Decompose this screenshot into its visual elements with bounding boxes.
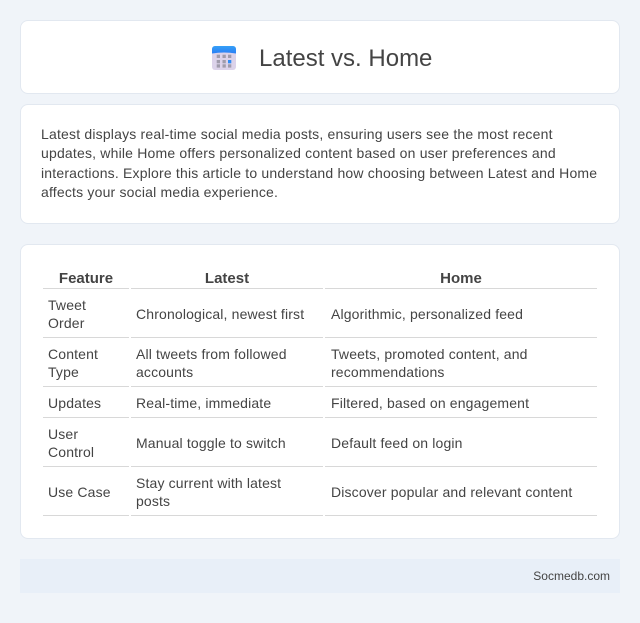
- row: Content Type: recommendations: [331, 364, 445, 380]
- row: Content Type: Content: [48, 346, 98, 362]
- row: Updates: Updates: [48, 395, 101, 411]
- icon: calendar: [212, 46, 236, 70]
- row: Tweet Order: Order: [48, 315, 85, 331]
- intro text: Latest displays real-time social media posts, ensuring users see the most recent: [41, 126, 553, 142]
- table header: Home: [440, 270, 482, 287]
- table header: Feature: [59, 270, 113, 287]
- row: Content Type: [48, 346, 528, 380]
- row: Use Case: [48, 475, 572, 509]
- footer bar: [20, 559, 620, 593]
- table header: [59, 270, 482, 287]
- intro text: affects your social media experience.: [41, 184, 278, 200]
- row: Updates: Filtered, based on engagement: [331, 395, 529, 411]
- row: Tweet Order: Chronological, newest first: [136, 306, 304, 322]
- title: Latest vs. Home: [259, 45, 432, 72]
- row: User Control: [48, 426, 463, 460]
- row: Content Type: All tweets from followed: [136, 346, 287, 362]
- row: Content Type: Tweets, promoted content, and: [331, 346, 528, 362]
- row: Tweet Order: Tweet: [48, 297, 86, 313]
- row: User Control: Manual toggle to switch: [136, 435, 286, 451]
- intro text: [41, 126, 597, 200]
- intro panel: [20, 104, 620, 224]
- row: Updates: [48, 395, 529, 411]
- row: Content Type: Type: [48, 364, 79, 380]
- row: Content Type: accounts: [136, 364, 193, 380]
- footer text: Socmedb.com: [533, 569, 610, 583]
- row: Tweet Order: Algorithmic, personalized feed: [331, 306, 523, 322]
- intro text: updates, while Home offers personalized content based on user preferences and: [41, 145, 556, 161]
- row: Use Case: Use Case: [48, 484, 111, 500]
- row: User Control: Default feed on login: [331, 435, 463, 451]
- row: Use Case: Stay current with latest: [136, 475, 281, 491]
- row: Use Case: Discover popular and relevant content: [331, 484, 572, 500]
- row: User Control: User: [48, 426, 78, 442]
- table header: Latest: [205, 270, 249, 287]
- intro text: interactions. Explore this article to understand how choosing between Latest and Home: [41, 165, 597, 181]
- row: Use Case: posts: [136, 493, 170, 509]
- row: User Control: Control: [48, 444, 94, 460]
- table panel: [20, 244, 620, 539]
- row: Updates: Real-time, immediate: [136, 395, 271, 411]
- row: Tweet Order: [48, 297, 523, 331]
- header panel: [20, 20, 620, 94]
